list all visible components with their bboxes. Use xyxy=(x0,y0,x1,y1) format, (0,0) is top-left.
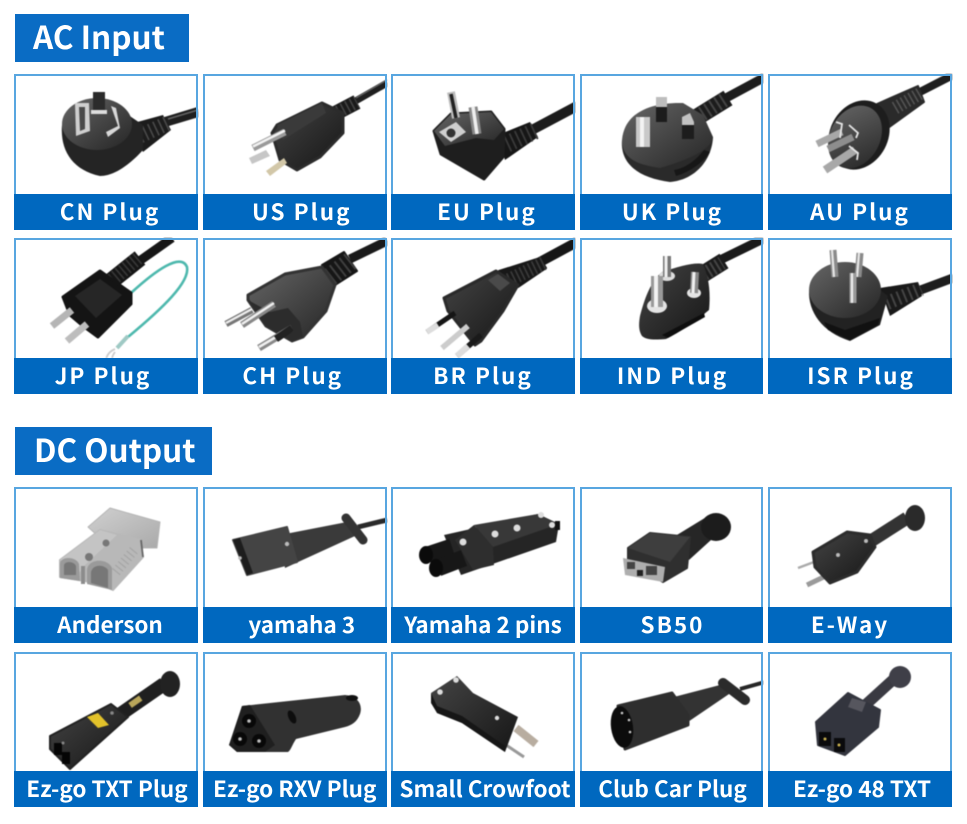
panel: Ez-go TXT Plug xyxy=(14,652,198,807)
panel: Yamaha 2 pins xyxy=(391,487,575,643)
heading: AC Input: AC Input xyxy=(33,13,165,59)
heading: DC Output: DC Output xyxy=(34,426,196,472)
label: EU Plug: EU Plug xyxy=(437,195,537,227)
label: CN Plug: CN Plug xyxy=(60,195,160,227)
label: AU Plug xyxy=(768,194,952,230)
label: IND Plug xyxy=(580,358,763,394)
panel: EU Plug xyxy=(391,74,575,230)
icon: CH plug xyxy=(224,237,388,352)
panel: ISR Plug xyxy=(768,238,952,394)
panel: Ez-go RXV Plug xyxy=(203,652,386,807)
icon: Ez-go 48 TXT connector xyxy=(814,665,912,757)
icon: Anderson connector xyxy=(58,507,161,592)
icon: Ez-go RXV connector xyxy=(228,694,362,753)
icon: E-Way connector xyxy=(797,504,926,588)
label: SB50 xyxy=(580,607,763,643)
label: CH Plug: CH Plug xyxy=(242,359,343,391)
label: AU Plug: AU Plug xyxy=(810,195,910,227)
label: Ez-go 48 TXT xyxy=(768,771,952,807)
icon: SB50 connector xyxy=(622,512,732,584)
label: US Plug xyxy=(203,194,386,230)
label: Anderson xyxy=(14,607,198,643)
icon: Club Car connector xyxy=(610,677,764,752)
label: EU Plug xyxy=(391,194,575,230)
panel: Ez-go 48 TXT xyxy=(768,652,952,807)
icon: US plug xyxy=(248,79,388,176)
panel: AU Plug xyxy=(768,74,952,230)
panel: BR Plug xyxy=(391,238,575,394)
label: CN Plug xyxy=(14,194,198,230)
label: Ez-go TXT Plug: Ez-go TXT Plug xyxy=(26,772,188,804)
label: yamaha 3 xyxy=(203,607,386,643)
label: yamaha 3: yamaha 3 xyxy=(248,608,355,640)
panel: CN Plug xyxy=(14,74,198,230)
icon: Small Crowfoot connector xyxy=(430,676,539,758)
label: Ez-go RXV Plug: Ez-go RXV Plug xyxy=(213,772,376,804)
label: IND Plug: IND Plug xyxy=(617,359,728,391)
panel: Anderson xyxy=(14,487,198,643)
panel: Small Crowfoot xyxy=(391,652,575,807)
icon: JP plug with green ground wire xyxy=(50,237,190,358)
label: Yamaha 2 pins: Yamaha 2 pins xyxy=(404,608,562,640)
label: BR Plug: BR Plug xyxy=(433,359,533,391)
label: Club Car Plug: Club Car Plug xyxy=(598,772,747,804)
icon: yamaha 3 connector xyxy=(231,512,388,577)
panel: UK Plug xyxy=(580,74,763,230)
icon: IND plug xyxy=(638,237,764,340)
label: Small Crowfoot: Small Crowfoot xyxy=(399,772,571,804)
icon: EU plug xyxy=(432,91,576,182)
icon: AU plug xyxy=(815,73,953,174)
panel: E-Way xyxy=(768,487,952,643)
icon: UK plug xyxy=(621,73,764,183)
label: JP Plug: JP Plug xyxy=(55,359,151,391)
label: SB50: SB50 xyxy=(641,608,704,640)
heading: AC Input xyxy=(15,14,189,62)
icon: BR plug xyxy=(425,237,576,358)
icon: ISR plug xyxy=(808,249,953,342)
label: E-Way: E-Way xyxy=(811,608,889,640)
label: CH Plug xyxy=(203,358,386,394)
label: Anderson: Anderson xyxy=(57,608,163,640)
panel: IND Plug xyxy=(580,238,763,394)
label: ISR Plug: ISR Plug xyxy=(807,359,915,391)
label: JP Plug xyxy=(14,358,198,394)
panel: US Plug xyxy=(203,74,386,230)
label: UK Plug xyxy=(580,194,763,230)
label: BR Plug xyxy=(391,358,575,394)
panel: yamaha 3 xyxy=(203,487,386,643)
panel: CH Plug xyxy=(203,238,386,394)
label: E-Way xyxy=(768,607,952,643)
label: Ez-go 48 TXT: Ez-go 48 TXT xyxy=(793,772,931,804)
label: US Plug: US Plug xyxy=(252,195,352,227)
label: ISR Plug xyxy=(768,358,952,394)
panel: JP Plug xyxy=(14,238,198,394)
icon: Ez-go TXT connector xyxy=(48,670,181,771)
icon: Yamaha 2 pin connector xyxy=(418,512,561,578)
label: UK Plug: UK Plug xyxy=(622,195,723,227)
panel: SB50 xyxy=(580,487,763,643)
icon: CN plug xyxy=(61,91,199,177)
panel: Club Car Plug xyxy=(580,652,763,807)
